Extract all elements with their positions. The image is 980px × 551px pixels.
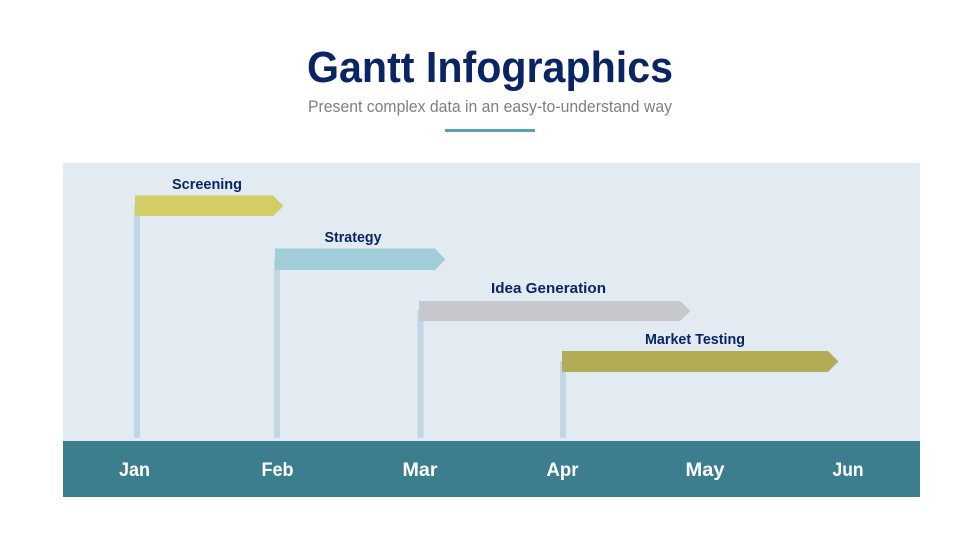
month: Apr: Apr [546, 460, 579, 481]
month: May: May [686, 460, 725, 481]
bar: Strategy [275, 248, 446, 270]
label: Idea Generation: Idea Generation [491, 280, 606, 297]
stem: Jan [134, 205, 140, 438]
stem: Mar [418, 310, 424, 438]
label: Strategy: Strategy [324, 229, 382, 246]
month: Mar: Mar [402, 460, 438, 481]
month: Feb: Feb [262, 460, 294, 481]
chart background [63, 163, 920, 441]
panel: gantt chart [63, 163, 920, 441]
bar: Screening [135, 196, 284, 216]
subtitle: Present complex data in an easy-to-understand way [308, 98, 673, 116]
band background [63, 441, 920, 497]
month: Jan: Jan [119, 460, 150, 481]
title: Gantt Infographics [307, 43, 673, 92]
month: Jun: Jun [832, 460, 864, 481]
label: Screening: Screening [172, 176, 242, 193]
month band [63, 441, 920, 497]
stem: Apr [560, 361, 566, 438]
bar: Market Testing [562, 351, 838, 372]
title accent line [445, 129, 535, 132]
label: Market Testing: Market Testing [645, 331, 745, 348]
stem: Feb [274, 258, 280, 438]
bar: Idea Generation [419, 301, 690, 321]
